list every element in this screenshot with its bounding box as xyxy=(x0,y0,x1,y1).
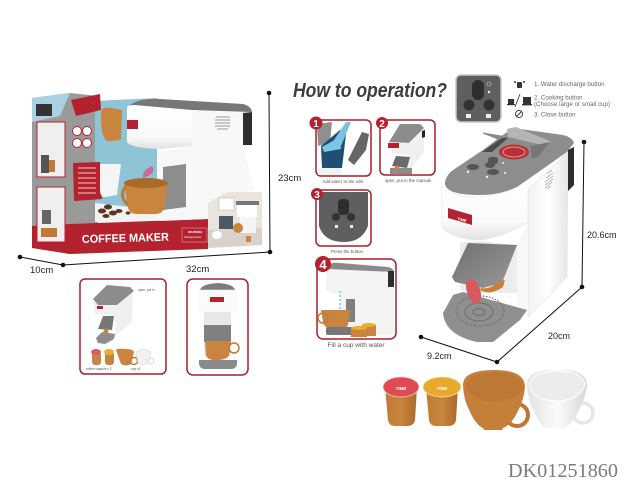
label: box depth: 10cm xyxy=(30,265,53,276)
box front panel xyxy=(70,93,208,254)
box image: cups and capsules xyxy=(98,108,168,218)
panel: open lid and capsule contents xyxy=(80,279,166,374)
side dark panel xyxy=(568,147,574,191)
step 4 caption: Fill a cup with water xyxy=(327,342,385,349)
caption: capsule count: coffee capsule x 2 xyxy=(86,367,112,371)
open flap xyxy=(452,243,517,288)
yellow coffee capsule: TIME xyxy=(437,386,447,391)
machine dimension lines xyxy=(419,140,586,364)
box warning label: WARNING xyxy=(188,230,203,234)
caption: cup count: cup x2 xyxy=(131,367,141,371)
step 4 panel xyxy=(315,256,396,339)
step 2 caption: open, put in the capsule xyxy=(385,178,432,183)
label: box width: 32cm xyxy=(186,264,209,275)
text: water discharge button: 1. Water discharge button xyxy=(534,81,605,88)
step 1 caption: Add water to the sink xyxy=(322,179,364,184)
step 3 panel xyxy=(311,188,371,246)
text: cup size note: (Choose large or small cup) xyxy=(534,101,610,108)
step 2 panel xyxy=(376,117,435,175)
side vents xyxy=(545,170,553,189)
label: machine width: 9.2cm xyxy=(427,351,452,361)
red coffee capsule: TIME xyxy=(396,386,406,391)
box machine image xyxy=(127,99,254,221)
box photo inset xyxy=(208,192,262,248)
control buttons xyxy=(467,157,499,175)
white cup xyxy=(527,369,593,428)
brand badge: TIME xyxy=(457,216,468,223)
box warning label: choking hazard xyxy=(184,236,202,239)
icon: close xyxy=(515,110,523,118)
machine body xyxy=(528,152,568,317)
control panel icon xyxy=(456,75,501,122)
icon: small and large cup xyxy=(507,94,532,107)
panel indicator dots xyxy=(467,162,506,178)
title: How to operation? xyxy=(293,80,447,102)
capsule holder xyxy=(466,279,505,304)
label: machine length: 20cm xyxy=(548,331,570,341)
main coffee machine xyxy=(441,127,574,342)
machine head front xyxy=(441,178,528,240)
red coffee capsule xyxy=(383,377,419,426)
mini capsules and cups xyxy=(91,349,154,366)
label: machine height: 20.6cm xyxy=(587,230,617,240)
caption: open, put in the capsule: open, put in xyxy=(138,288,155,292)
step 1 panel xyxy=(310,116,371,176)
mini machine xyxy=(93,285,134,344)
box warning label xyxy=(182,228,207,242)
column strip xyxy=(517,223,528,317)
icon: water discharge xyxy=(514,81,525,88)
step 3 caption: Press the button xyxy=(331,249,364,254)
product box xyxy=(32,93,262,254)
text: close button: 3. Close button xyxy=(534,112,576,118)
label: box height: 23cm xyxy=(278,173,301,184)
machine grey top xyxy=(445,128,574,195)
text: cooking button: 2. Cooking button xyxy=(534,94,583,102)
capsule lid and compartment xyxy=(482,127,552,160)
drip tray xyxy=(443,292,527,342)
yellow coffee capsule xyxy=(423,377,461,426)
panel: machine filling cup xyxy=(187,279,248,375)
box title: coffee maker: COFFEE MAKER xyxy=(82,232,170,246)
legend xyxy=(507,81,610,118)
step 2 badge: 2 xyxy=(379,119,385,130)
step 3 badge: 3 xyxy=(314,190,320,201)
step 1 badge: 1 xyxy=(313,119,319,130)
box dimension lines xyxy=(18,91,272,267)
step 4 badge: 4 xyxy=(319,257,327,272)
orange cup xyxy=(463,370,528,430)
recess xyxy=(460,241,517,293)
box side panel xyxy=(32,93,70,254)
brand badge xyxy=(448,208,472,225)
